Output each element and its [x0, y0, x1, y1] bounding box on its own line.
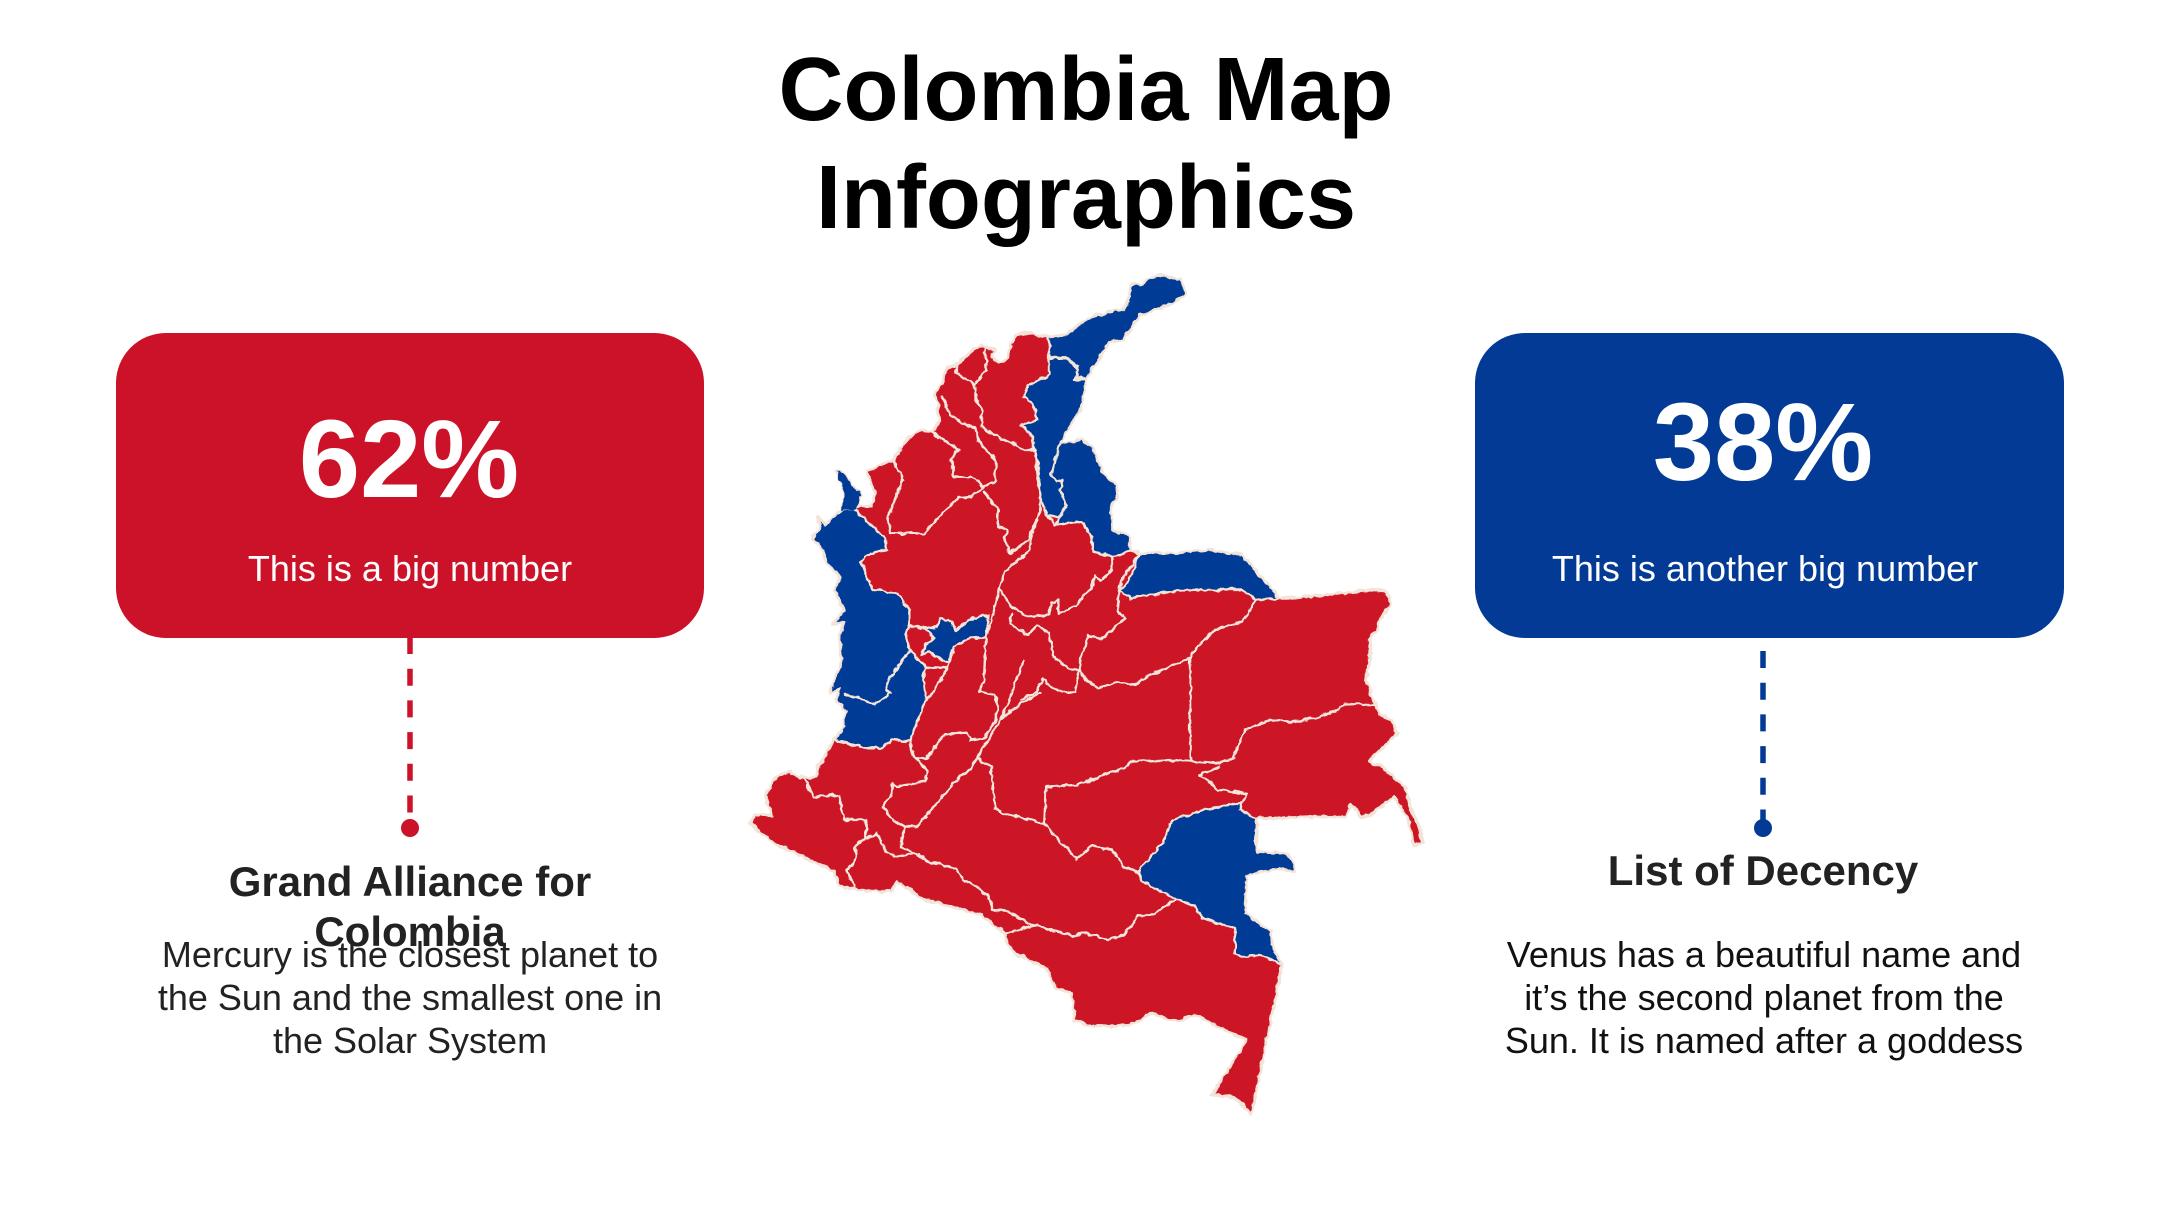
region: La Guajira (blue)	[1049, 275, 1186, 378]
region: Norte de Santander (blue)	[1051, 440, 1131, 557]
heading: Grand Alliance for Colombia	[229, 858, 591, 955]
region: Arauca (blue)	[1120, 550, 1280, 600]
map of Colombia	[750, 275, 1422, 1115]
text block: Mercury: Mercury is the closest planet to	[162, 934, 658, 975]
map silhouette: red departments	[750, 275, 1422, 1115]
panel: red big number card	[116, 333, 704, 638]
region: Vaupes and Guaviare east (blue)	[1137, 803, 1294, 965]
panel: blue big number card	[1475, 333, 2064, 638]
big number 38%: 38%	[1653, 381, 1873, 504]
text block: Mercury: the Sun and the smallest one in	[158, 977, 662, 1018]
text block: Venus: it’s the second planet from the	[1524, 977, 2004, 1018]
heading: Grand Alliance for Colombia: Grand Alliance for	[229, 858, 591, 905]
text block: Mercury: the Solar System	[273, 1020, 547, 1061]
text block: Mercury	[158, 934, 662, 1061]
region: Caldas and Risaralda (blue)	[921, 615, 988, 662]
card caption right: This is another big number	[1552, 548, 1978, 589]
text block: Venus	[1505, 934, 2023, 1061]
connector: red dashed line with dot	[401, 637, 419, 837]
title: Infographics	[816, 148, 1356, 248]
text block: Venus: Venus has a beautiful name and	[1507, 934, 2021, 975]
department borders	[802, 348, 1375, 939]
card caption left: This is a big number	[248, 548, 572, 589]
text block: Venus: Sun. It is named after a goddess	[1505, 1020, 2023, 1061]
region: Cesar (blue)	[1021, 358, 1086, 518]
title	[778, 40, 1394, 248]
big number 62%: 62%	[299, 398, 519, 521]
heading: List of Decency: List of Decency	[1608, 847, 1919, 894]
region: Gulf of Uraba strip (blue)	[836, 471, 861, 511]
heading: Grand Alliance for Colombia: Colombia	[314, 908, 506, 955]
region: Choco and Valle (blue)	[811, 508, 926, 748]
title: Colombia Map	[778, 40, 1394, 140]
connector: blue dashed line with dot	[1754, 619, 1772, 837]
